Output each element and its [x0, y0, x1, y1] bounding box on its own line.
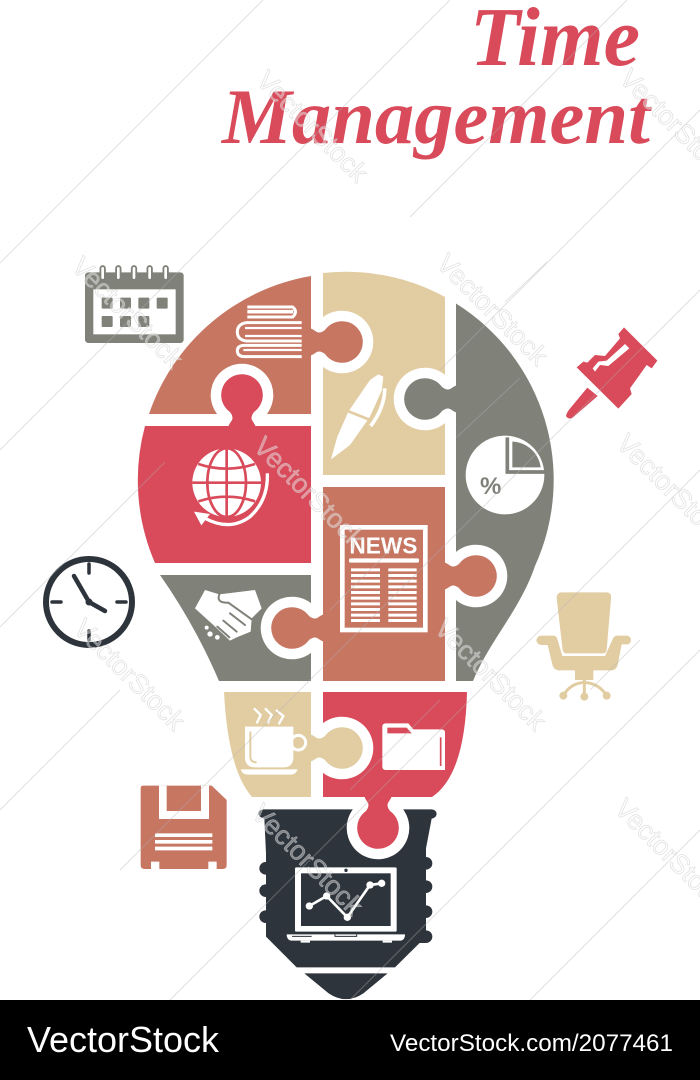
icon: globe with arrow [192, 448, 267, 525]
icon: handshake [195, 590, 262, 641]
icon: books [237, 307, 302, 357]
icon: calendar [85, 268, 184, 343]
icon: push pin [566, 327, 657, 419]
watermark: VectorStock [246, 798, 369, 921]
watermark: VectorStock [66, 251, 189, 374]
footer bar [0, 1000, 700, 1080]
panel: dark bulb base with laptop [258, 809, 437, 999]
panel: red folder piece [323, 692, 467, 849]
icon: folder [382, 723, 445, 770]
panel: terracotta newspaper piece [271, 487, 497, 681]
panel: gray handshake piece [160, 575, 311, 681]
icon: pie chart: % [480, 473, 501, 500]
icon: office chair [536, 592, 631, 701]
panel: red globe piece [138, 374, 311, 563]
watermark: VectorStock [431, 248, 554, 371]
icon: newspaper [342, 527, 425, 630]
watermark: VectorStock [68, 613, 191, 736]
panel: gray pie chart piece [404, 304, 554, 681]
icon: coffee cup [241, 708, 306, 775]
footer bar: VectorStock [27, 1019, 220, 1060]
icon: clock [46, 559, 132, 645]
watermark: VectorStock [429, 613, 552, 736]
icon: pen [331, 374, 385, 459]
watermark: VectorStock [248, 431, 371, 554]
icon: newspaper: NEWS [349, 532, 417, 558]
icon: laptop with chart [287, 867, 405, 943]
watermark: VectorStock [251, 65, 374, 188]
panel: beige pen piece [323, 272, 445, 475]
icon: pie chart [466, 436, 545, 514]
title [220, 0, 652, 160]
title: Management [220, 73, 652, 160]
panel: terracotta books piece [149, 276, 363, 414]
footer bar: VectorStock.com/2077461 [390, 1030, 673, 1057]
panel: beige coffee piece [224, 692, 363, 797]
icon: floppy disk [141, 786, 227, 869]
